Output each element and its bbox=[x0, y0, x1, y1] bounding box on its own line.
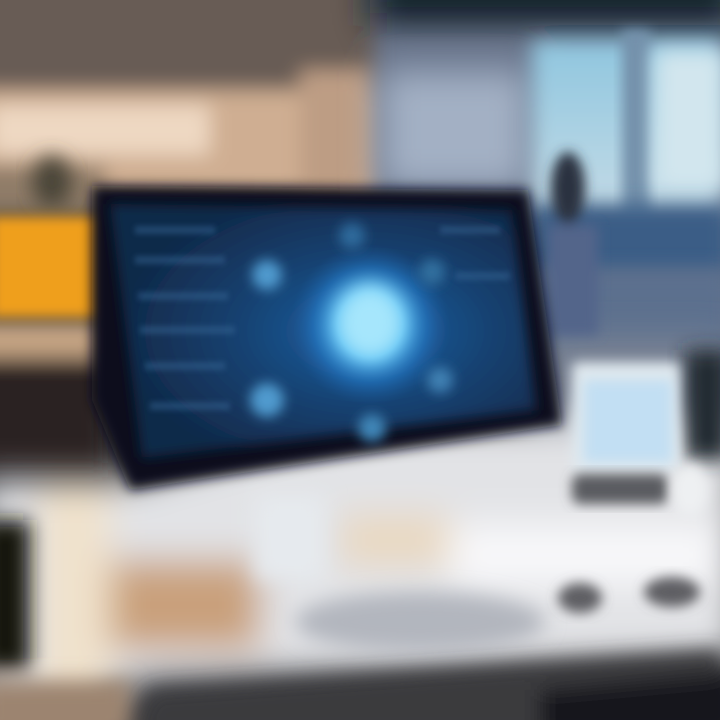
orange panel bbox=[0, 216, 102, 318]
glasses on desk bbox=[558, 577, 700, 613]
blue wall area bbox=[370, 0, 720, 190]
screen text lines bbox=[135, 226, 510, 410]
screen nodes bbox=[250, 223, 453, 442]
monitor bbox=[92, 186, 562, 490]
central glow bbox=[290, 245, 450, 405]
person silhouette bbox=[548, 152, 598, 335]
plant silhouette on shelf bbox=[32, 156, 72, 208]
desk front edge bbox=[130, 650, 720, 720]
window with city view bbox=[530, 30, 720, 460]
tablet bbox=[572, 362, 708, 516]
monitor stand bbox=[255, 495, 545, 652]
right dark edge bbox=[685, 350, 720, 460]
monitor screen bbox=[110, 204, 536, 458]
desk surface bbox=[0, 420, 720, 720]
monitor bezel bbox=[92, 186, 562, 490]
left dark plant and warm floor bbox=[0, 520, 130, 720]
ceiling and beige wall bbox=[0, 0, 375, 470]
